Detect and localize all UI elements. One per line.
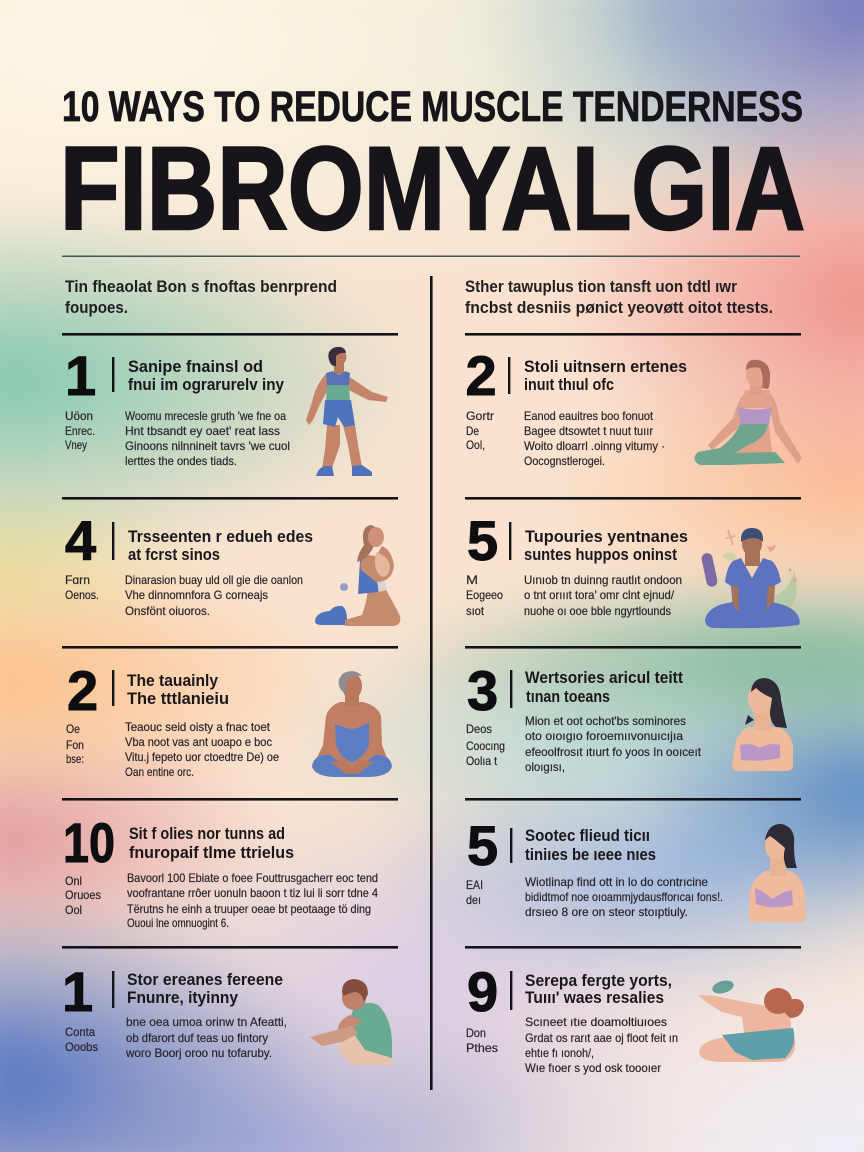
item: number 2 (left): Teaouc seid oisty a fnac toet: [125, 720, 271, 734]
item: number 3: Oolıa t: [466, 754, 498, 768]
item: number 2 (right): Eanod eauitres boo fonuot: [524, 409, 654, 423]
icon: woman bust profile: [749, 824, 806, 922]
item: number 1: Enrec.: [65, 424, 95, 438]
item: number 5 (lower): 5: [467, 814, 498, 877]
item: number 2 (right): Ool,: [466, 438, 485, 452]
item: number 9: Scıneet ıtıe doamoltiuıoes: [525, 1015, 667, 1029]
item: number 2 (left): [66, 659, 392, 779]
item: number 2 (left): The tauainly: [127, 672, 219, 690]
item: number 5: 5: [467, 509, 498, 572]
item: number 5: [466, 509, 800, 628]
item: number 2 (right): inuıt thıul ofc: [524, 376, 614, 394]
item: number 3: oloıgısı,: [525, 760, 565, 774]
item: number 2 (right): [466, 344, 802, 468]
item: number 3: oto oıoıgıo foroemııvonuıcıjıa: [525, 729, 683, 743]
item: number 5: Eogeeo: [466, 588, 503, 602]
item: number 2 (right): Woito dloarrl .oinng vitumy ·: [524, 439, 665, 453]
item: number 1: [65, 344, 388, 476]
item: number 2 (left): Oan entine orc.: [125, 765, 194, 779]
item: number 4: Trsseenten r edueh edes: [128, 528, 313, 546]
item: number 1: fnui im ograrurelv iny: [128, 376, 285, 394]
item: number 1: Woomu mrecesle gruth 'we fne oa: [125, 409, 286, 423]
item: number 5: sıot: [466, 604, 485, 618]
item: number 9: Grdat os rarıt aae oj floot feit ın: [525, 1031, 678, 1045]
item: number 3: 3: [467, 659, 498, 722]
item: number 2 (left): The tttlanieiu: [127, 690, 229, 708]
intro text right: [465, 277, 773, 317]
item: number 5 (lower): deı: [466, 893, 481, 907]
item: number 9: Wıe fıoer s yod osk toooıer: [525, 1061, 661, 1075]
item: number 1: Sanipe fnainsl od: [128, 358, 263, 376]
item: number 5: nuohe oı ooe bble ngyrtlounds: [524, 604, 671, 618]
intro text right: fncbst desniis pønict yeovøtt oitot ttests.: [465, 298, 773, 317]
item: number 1 (bottom left): Conta: [65, 1025, 95, 1039]
item: number 3: Wertsories aricul teitt: [525, 669, 683, 687]
item: number 5 (lower): EAI: [466, 878, 483, 892]
item: number 10: 10: [63, 811, 115, 874]
item: number 5: Tupouries yentnanes: [525, 528, 688, 546]
item: number 9: 9: [467, 960, 498, 1023]
item: number 5 (lower): Sootec flieud ticıı: [525, 827, 650, 845]
item: number 10: Onl: [65, 874, 82, 888]
icon: seated meditating man: [312, 671, 392, 777]
panel: right column: [465, 277, 806, 1075]
item: number 4: at fcrst sinos: [128, 546, 220, 564]
item: number 5 (lower): drsıeo 8 ore on steor stoıptiuly.: [525, 905, 688, 919]
item: number 9: Pthes: [466, 1041, 498, 1055]
icon: standing woman: [306, 347, 388, 476]
item: number 1 (bottom left): Fnunre, ityinny: [127, 989, 239, 1007]
item: number 2 (left): bse:: [66, 752, 84, 766]
item: number 9: Tuııı' waes resalies: [525, 989, 664, 1007]
item: number 4: 4: [65, 509, 96, 572]
item: number 9: [466, 960, 804, 1075]
icon: man sitting with hands out: [310, 979, 392, 1065]
icon: kneeling woman: [315, 525, 400, 626]
item: number 4: [65, 509, 400, 626]
item: number 1: Hnt tbsandt ey oaet' reat lass: [125, 424, 280, 438]
item: number 10: [63, 811, 378, 930]
item: number 5 (lower): [466, 814, 806, 922]
item: number 4: Onsfönt oiuoros.: [125, 604, 210, 618]
item: number 10: voofrantane rrôer uonuln baoon t tiz lui li sorr tdne 4: [127, 886, 378, 900]
item: number 5 (lower): bididtmof noe oıoammjydausfforıcaı fons!.: [525, 890, 723, 904]
item: number 3: Coocıng: [466, 739, 505, 753]
item: number 2 (left): Fon: [66, 738, 84, 752]
item: number 9: ehtıe fı ıonoh/,: [525, 1046, 594, 1060]
item: number 2 (right): 2: [466, 344, 497, 407]
item: number 2 (left): Vitu.j fepeto uor ctoedtre De) oe: [125, 750, 279, 764]
item: number 2 (right): Stoli uitnsern ertenes: [524, 358, 687, 376]
item: number 9: Don: [466, 1026, 486, 1040]
item: number 2 (right): Bagee dtsowtet t nuut tuıır: [524, 424, 653, 438]
item: number 1: 1: [65, 344, 96, 407]
item: number 10: Ool: [65, 903, 82, 917]
intro text left: foupoes.: [65, 298, 128, 317]
item: number 1 (bottom left): Ooobs: [65, 1040, 98, 1054]
item: number 2 (right): Gortr: [466, 409, 494, 423]
intro text left: [65, 277, 337, 317]
item: number 1 (bottom left): bne oea umoa orinw tn Afeatti,: [126, 1015, 287, 1029]
item: number 1 (bottom left): woro Boorj oroo nu tofaruby.: [125, 1046, 272, 1060]
title: [60, 83, 805, 255]
item: number 10: Tërutns he einh a truuper oeae bt peotaage tö ding: [127, 902, 371, 916]
item: number 3: tınan toeans: [526, 688, 610, 706]
item: number 5: Uınıob tn duinng rautlıt ondoon: [524, 573, 682, 587]
intro text right: Sther tawuplus tion tansft uon tdtl ıwr: [465, 277, 737, 296]
icon: woman with long dark hair: [732, 678, 793, 771]
item: number 5 (lower): tiniıes be ıeee nıes: [525, 846, 656, 864]
intro text left: Tin fheaolat Bon s fnoftas benrprend: [65, 277, 337, 296]
item: number 4: Vhe dinnomnfora G corneajs: [125, 588, 268, 602]
item: number 2 (right): Oocognstlerogei.: [524, 454, 605, 468]
item: number 3: efeoolfrosıt ıtıurt fo yoos In ooıceıt: [525, 745, 702, 759]
item: number 2 (left): Oe: [66, 722, 80, 736]
item: number 10: Bavoorl 100 Ebiate o foee Fouttrusgacherr eoc tend: [127, 871, 378, 885]
item: number 5: o tnt orıııt tora' omr clnt ejnud/: [524, 588, 675, 602]
item: number 9: Serepa fergte yorts,: [525, 972, 672, 990]
item: number 4: Fɑrn: [65, 573, 90, 587]
icon: woman reaching with stone: [698, 978, 804, 1062]
item: number 1 (bottom left): [62, 960, 392, 1065]
item: number 3: Mion et oot ochot'bs sominores: [525, 714, 686, 728]
item: number 10: fnuropaif tlme ttrielus: [129, 844, 294, 862]
item: number 2 (left): 2: [67, 659, 98, 722]
item: number 4: Oenos.: [65, 588, 99, 602]
item: number 5: suntes huppos oninst: [524, 546, 677, 564]
item: number 3: [466, 659, 793, 774]
item: number 5 (lower): Wiotlinap find ott in lo do contrıcine: [525, 875, 708, 889]
item: number 10: Oruoes: [65, 888, 101, 902]
item: number 1: Uöon: [65, 409, 93, 423]
item: number 4: Dinarasion buay uld oll gie die oanlon: [125, 573, 303, 587]
item: number 1: Vney: [65, 438, 87, 452]
item: number 1 (bottom left): 1: [62, 960, 93, 1023]
item: number 1: lerttes the ondes tiads.: [125, 454, 237, 468]
panel: left column: [62, 277, 400, 1065]
item: number 1 (bottom left): Stor ereanes fereene: [127, 971, 283, 989]
item: number 5: M: [466, 573, 478, 587]
item: number 1 (bottom left): ob dfarort duf teas uo fintory: [126, 1031, 268, 1045]
item: number 2 (right): De: [466, 424, 479, 438]
item: number 2 (left): Vba noot vas ant uoapo e boc: [125, 735, 272, 749]
item: number 10: Sit f olies nor tunns ad: [129, 825, 285, 843]
item: number 3: Deos: [466, 722, 492, 736]
icon: meditating person with plants: [701, 528, 800, 628]
item: number 1: Ginoons nilnnineit tavrs 'we cuol: [125, 439, 290, 453]
item: number 10: Ououi lne omnuogint 6.: [127, 916, 229, 930]
icon: seated woman in purple and green: [694, 360, 802, 465]
